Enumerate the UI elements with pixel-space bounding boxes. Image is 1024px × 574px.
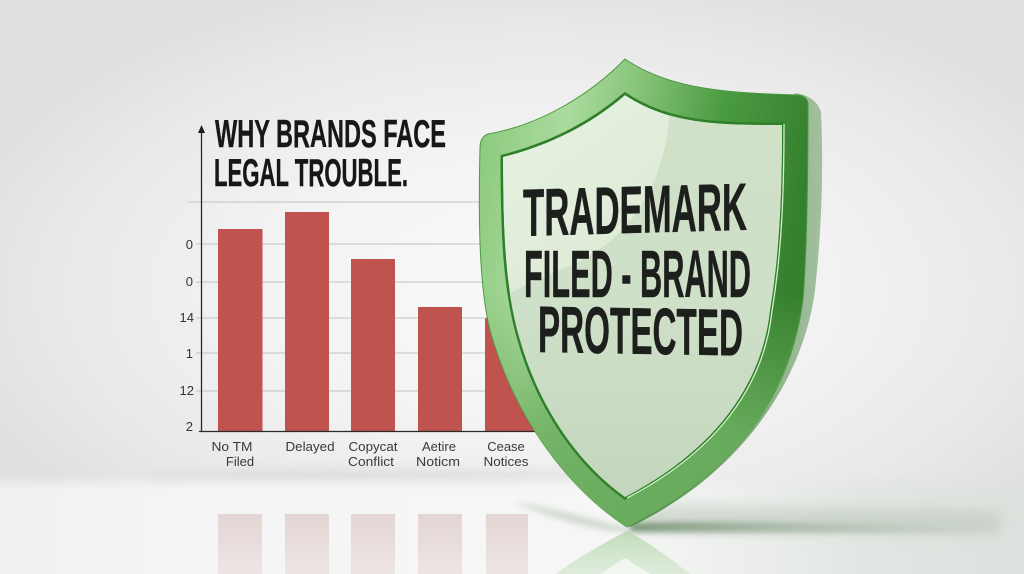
grid lines: [188, 202, 490, 391]
shield side extrusion: [620, 93, 822, 527]
x axis labels: Filed: [226, 454, 254, 469]
y axis labels: 1: [186, 346, 193, 361]
frame highlight: [627, 124, 784, 498]
x axis labels: Delayed: [286, 439, 334, 454]
x axis labels: No TM: [212, 439, 252, 454]
shield shadow on floor: [515, 502, 1000, 534]
bars: [218, 212, 535, 431]
x axis: [199, 430, 540, 432]
y axis labels: 0: [186, 274, 193, 289]
x axis labels: [212, 439, 529, 469]
x axis labels: Aetire: [422, 439, 456, 454]
x axis labels: Conflict: [348, 454, 394, 469]
shield: [479, 59, 822, 527]
chart title: LEGAL TROUBLE.: [214, 152, 408, 195]
y axis labels: 0: [186, 237, 193, 252]
chart title: [214, 113, 446, 195]
x axis labels: Cease: [487, 439, 525, 454]
bar reflections on floor: [218, 514, 528, 574]
shield: FILED - BRAND: [524, 237, 751, 312]
y axis with arrow: [198, 125, 205, 431]
chart title: WHY BRANDS FACE: [215, 113, 446, 156]
x axis labels: Copycat: [348, 439, 398, 454]
shield frame: [479, 59, 808, 527]
y axis labels: [180, 237, 194, 434]
x axis labels: Noticm: [416, 454, 460, 469]
shield text: [523, 170, 751, 370]
y axis labels: 2: [186, 419, 193, 434]
shield text: TRADEMARK: [523, 170, 747, 251]
shield text: PROTECTED: [538, 292, 743, 370]
x axis labels: Notices: [484, 454, 529, 469]
bar chart: why brands face legal trouble: [180, 113, 540, 469]
y axis labels: 12: [180, 383, 194, 398]
shield glass panel: [500, 95, 800, 500]
shield reflection: [555, 531, 690, 574]
y axis labels: 14: [180, 310, 194, 325]
glass darker area: [510, 116, 782, 497]
frame inner dark edge: [503, 95, 782, 497]
